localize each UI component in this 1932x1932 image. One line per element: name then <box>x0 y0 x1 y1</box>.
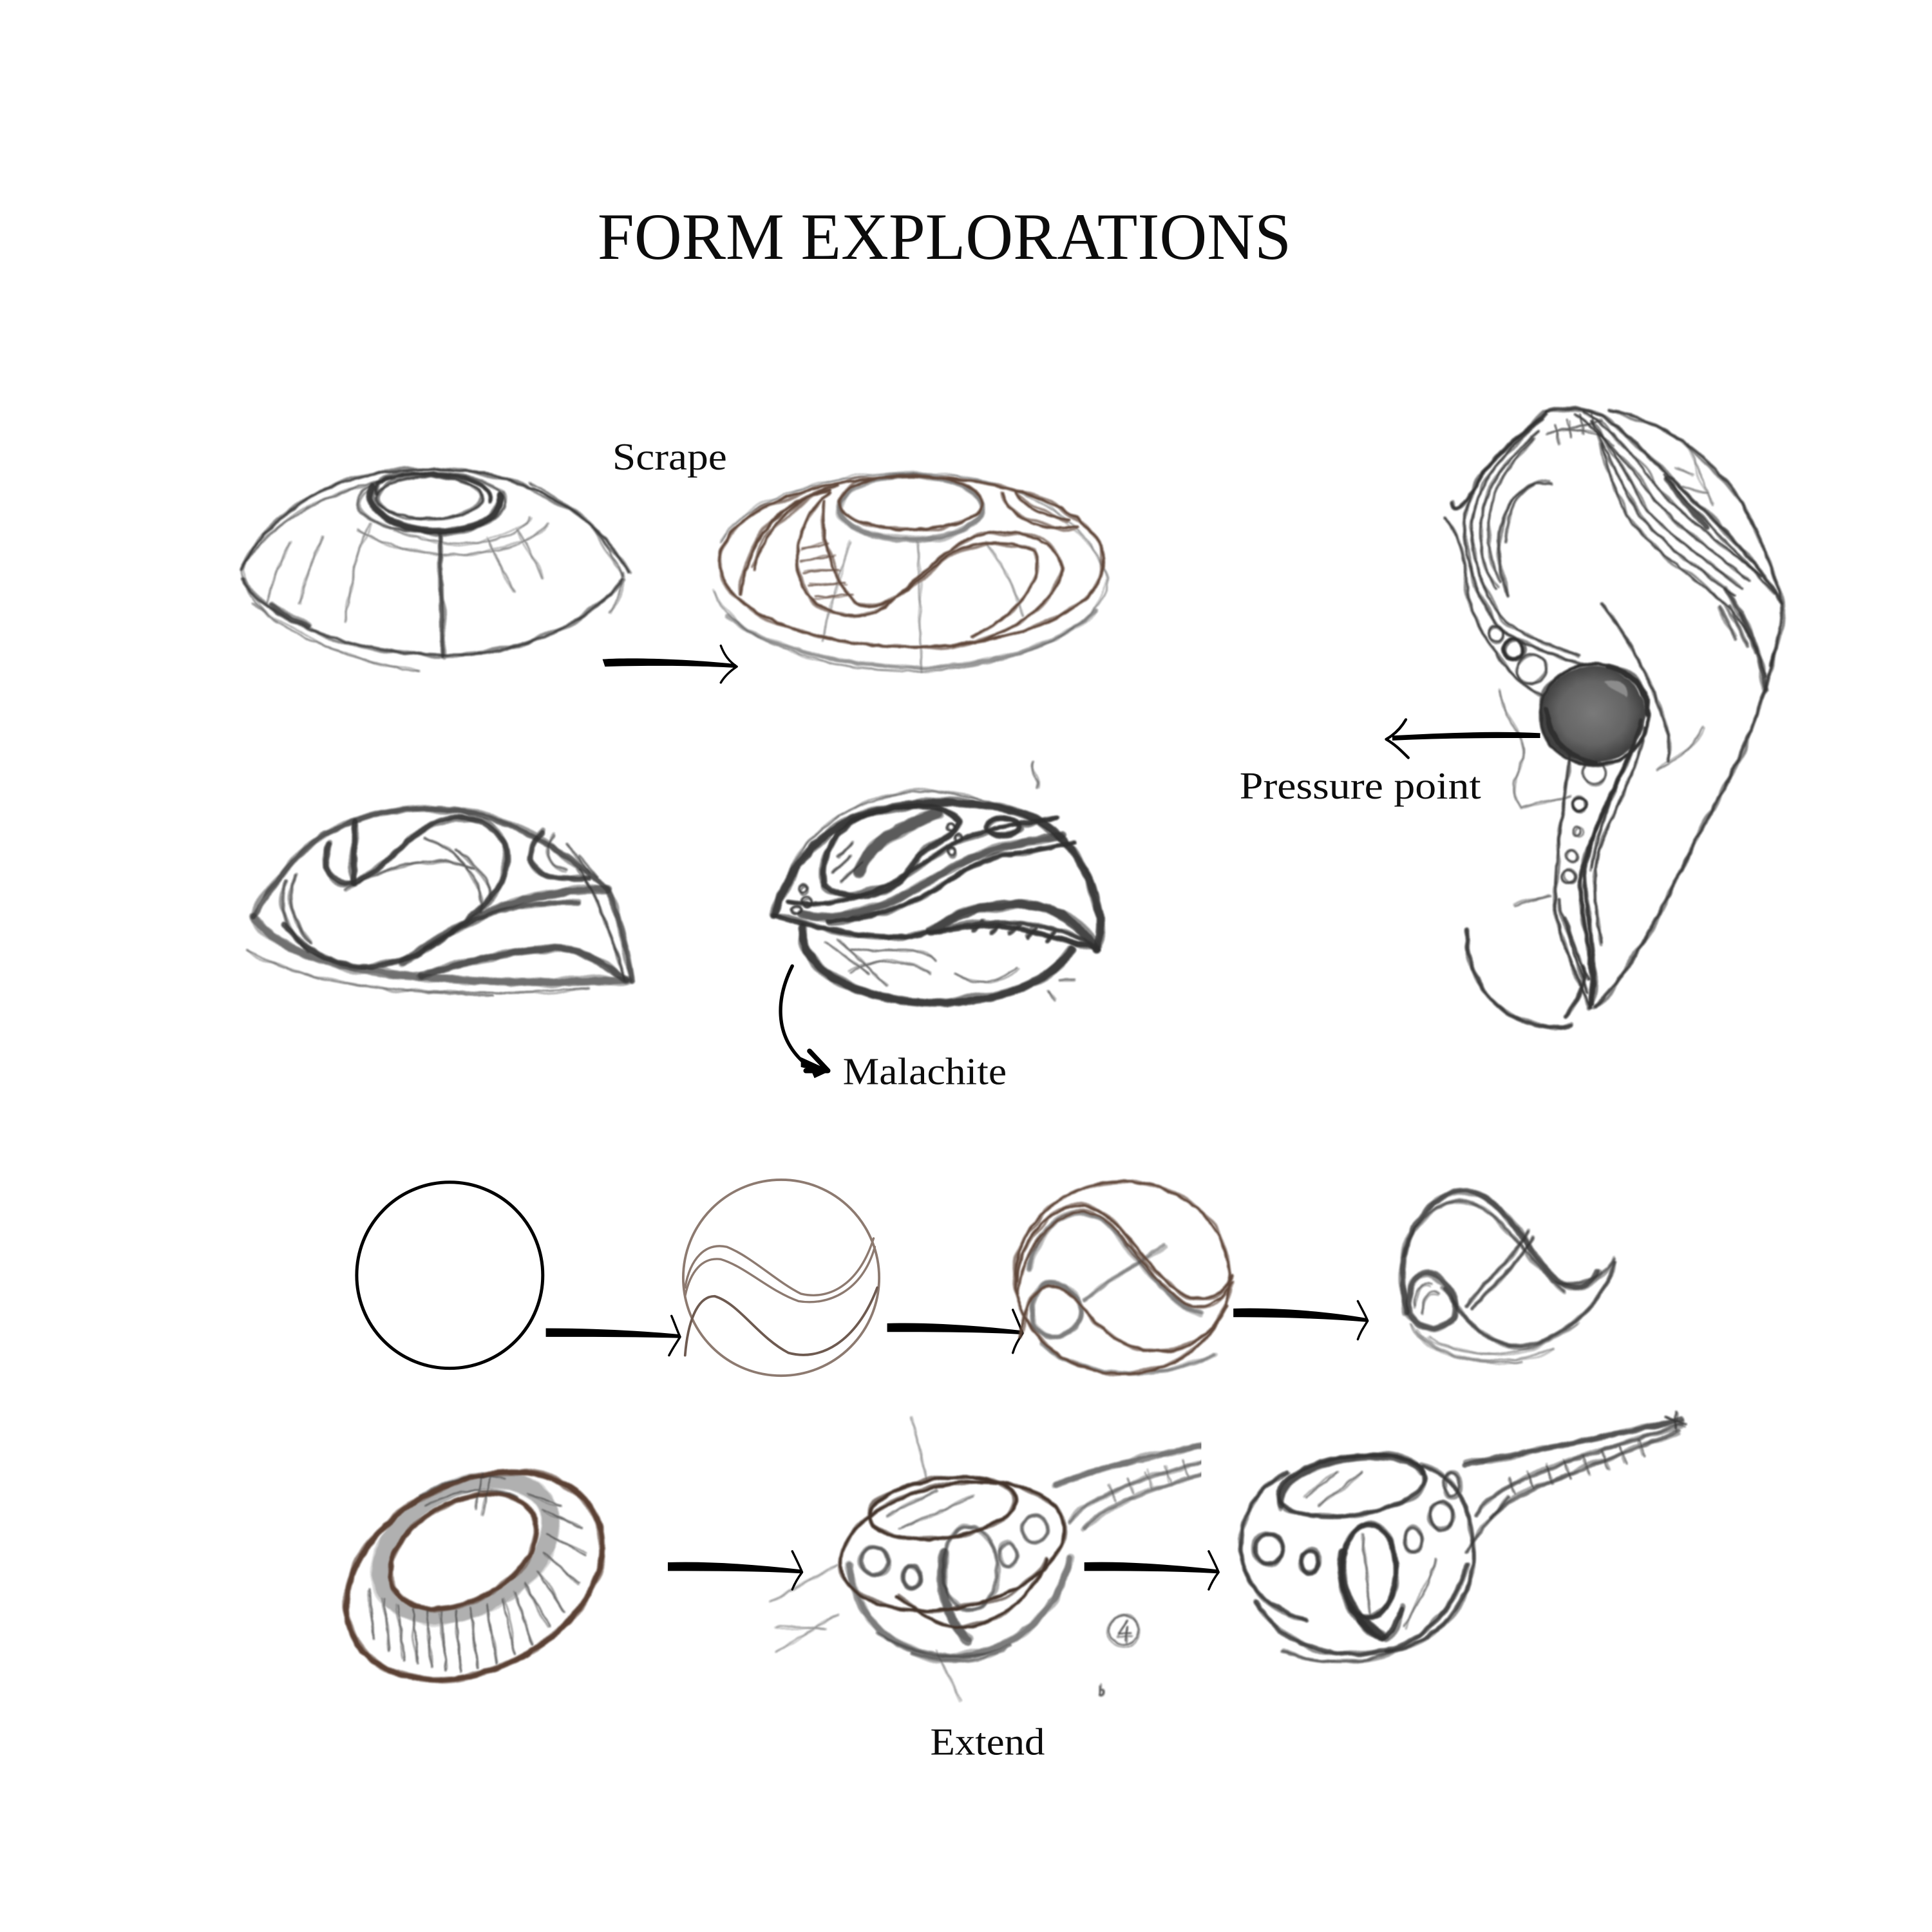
sketch: malachite dome <box>774 761 1101 1003</box>
label: Malachite: Malachite <box>843 1050 1007 1093</box>
circle: step 1 <box>357 1182 543 1368</box>
arrow: row 1 step 3 <box>1233 1301 1368 1340</box>
sketch: ear with pendant <box>1444 408 1782 1027</box>
canvas <box>238 215 1786 1755</box>
pendant sphere <box>1540 664 1649 765</box>
top wave band <box>1546 408 1782 690</box>
sketch: half dome with wave <box>248 809 632 996</box>
arrow: row 2 step 2 <box>1084 1551 1218 1589</box>
sketch: plain dome <box>242 469 629 672</box>
beads lower <box>1562 761 1605 884</box>
label: Extend: Extend <box>931 1720 1045 1763</box>
lower stem <box>1515 721 1645 1008</box>
label: Scrape: Scrape <box>612 435 727 478</box>
arrow: scrape <box>603 646 737 683</box>
arrow: row 2 step 1 <box>668 1551 802 1589</box>
small sketch numeral <box>1101 1615 1139 1696</box>
arrow: malachite <box>781 966 831 1078</box>
ear lobe arc <box>1466 931 1584 1027</box>
sketch: dome with brown overlay <box>715 473 1109 672</box>
sketch: circle with infinity wave <box>1016 1182 1232 1374</box>
tragus line <box>1499 691 1703 807</box>
label: Pressure point: Pressure point <box>1240 764 1481 807</box>
sketch: ring with extension <box>770 1417 1208 1700</box>
sketch: final extended ring <box>1241 1412 1685 1662</box>
beads upper <box>1488 626 1546 684</box>
sketch: brown ring <box>311 1431 638 1721</box>
left wave band <box>1444 412 1669 761</box>
outer ear outline <box>1595 410 1782 1007</box>
title: FORM EXPLORATIONS <box>598 200 1291 274</box>
sketch: circle with brown S <box>683 1180 879 1376</box>
sketch: pencil infinity <box>1403 1190 1614 1363</box>
arrow: row 1 step 2 <box>887 1310 1023 1353</box>
arrow: pressure point <box>1386 719 1540 758</box>
arrow: row 1 step 1 <box>546 1316 680 1356</box>
